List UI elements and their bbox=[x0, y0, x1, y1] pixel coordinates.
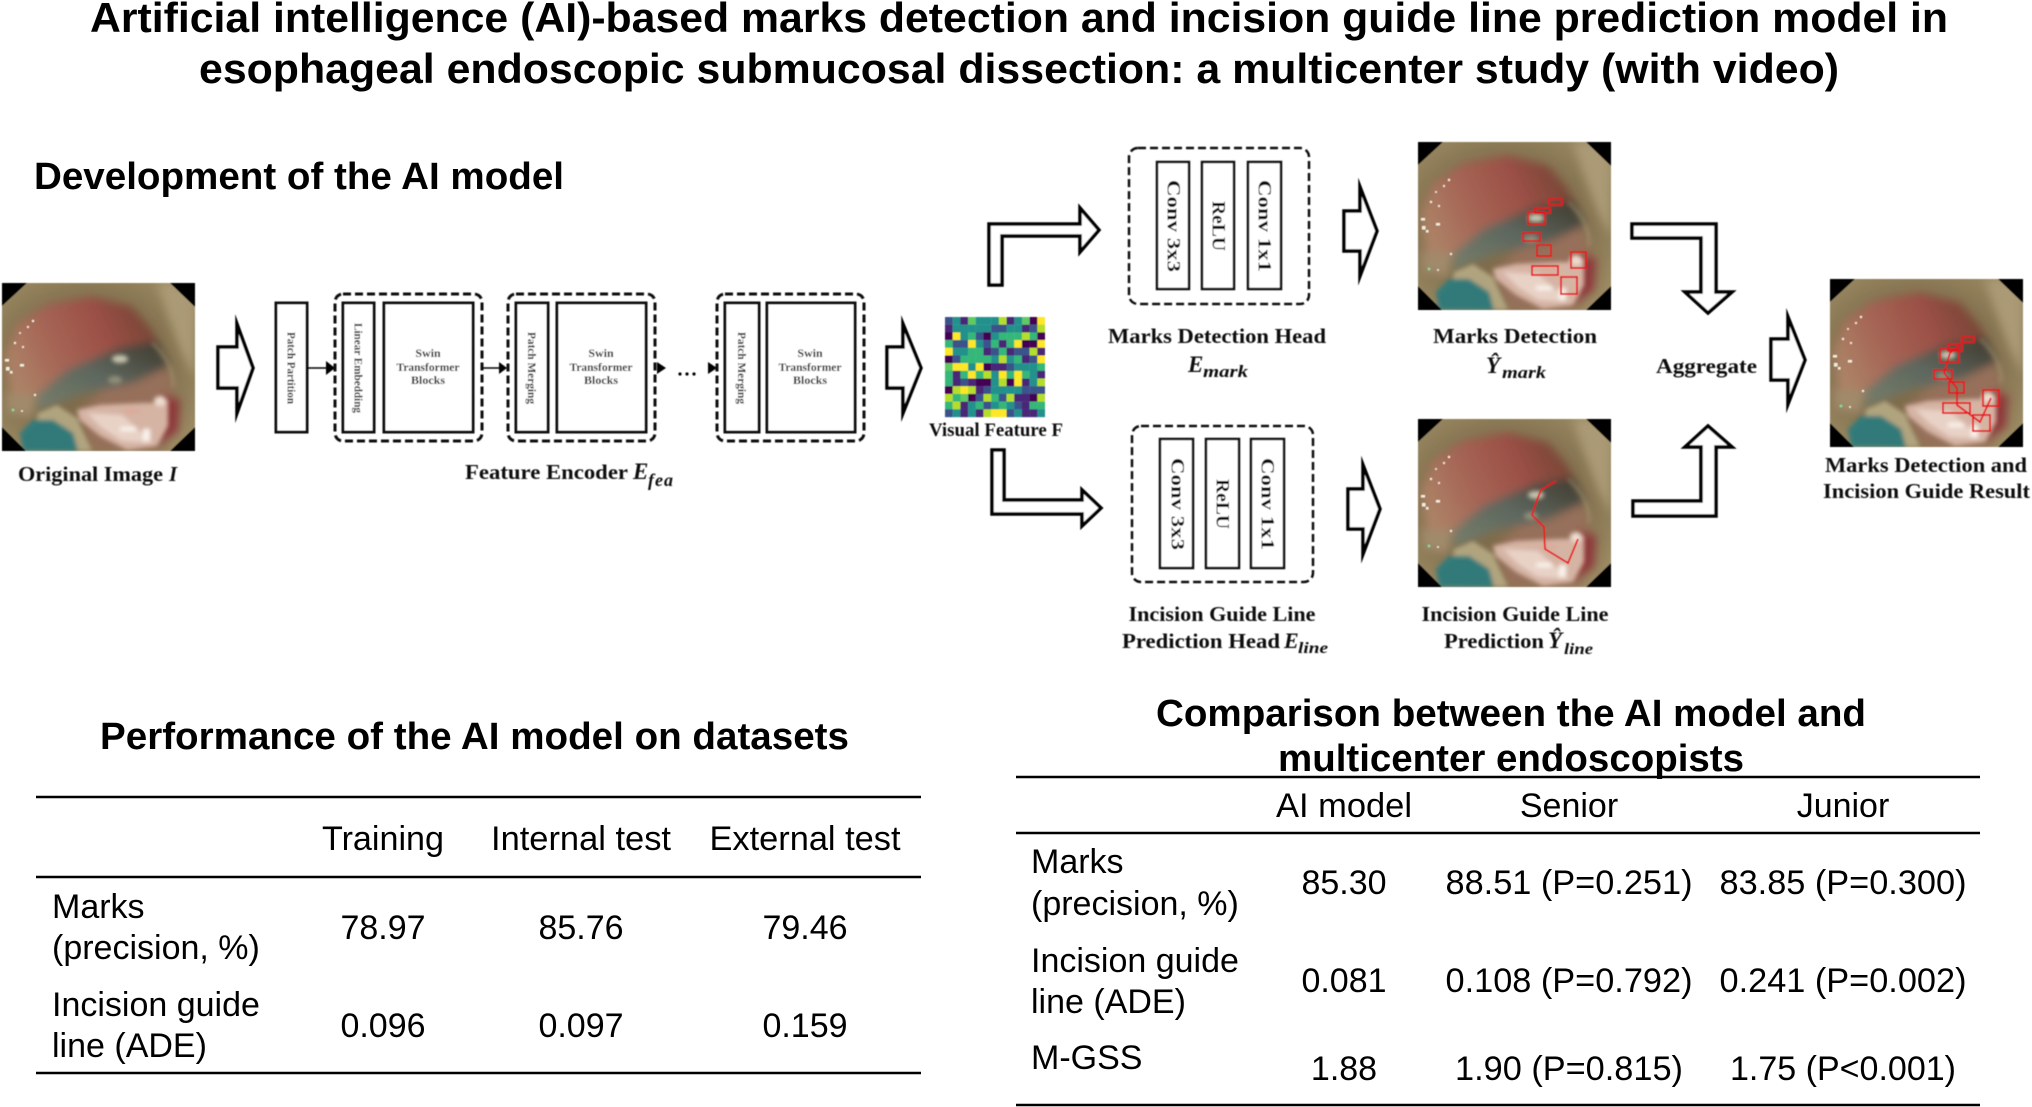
row: incision guide line ADE: 0.097 bbox=[538, 1007, 624, 1045]
heading: comparison: Comparison between the AI model and bbox=[1156, 693, 1866, 735]
encoder stage 1: Transformer bbox=[396, 360, 460, 374]
image: incision guide line output: Ŷ bbox=[1548, 627, 1564, 653]
image: incision guide line output: line bbox=[1564, 641, 1593, 658]
column headers: Senior bbox=[1520, 787, 1618, 825]
marks detection head: Conv 3x3 bbox=[1162, 180, 1184, 272]
heading: comparison: multicenter endoscopists bbox=[1278, 738, 1744, 780]
panel: comparison table bbox=[1016, 693, 1980, 1105]
row: M-GSS: 1.88 bbox=[1311, 1050, 1377, 1088]
encoder stage 1 bbox=[335, 294, 482, 441]
row: marks precision: Marks bbox=[1031, 843, 1124, 881]
marks detection head: Conv 1x1 bbox=[1254, 180, 1274, 272]
incision guide line prediction head: Conv 3x3 bbox=[1166, 458, 1188, 550]
image: marks detection output bbox=[1418, 142, 1611, 382]
encoder stage 2: Swin bbox=[588, 346, 614, 360]
row: incision guide line ADE: 0.081 bbox=[1301, 962, 1387, 1000]
arrow: original image to patch partition bbox=[218, 324, 253, 413]
row: marks precision: (precision, %) bbox=[52, 929, 260, 967]
row: M-GSS: 1.90 (P=0.815) bbox=[1455, 1050, 1683, 1088]
image: marks detection output: Marks Detection bbox=[1433, 324, 1597, 348]
incision guide line prediction head: ReLU bbox=[1212, 479, 1232, 529]
encoder stage 3: Blocks bbox=[793, 373, 827, 387]
label: feature encoder: E bbox=[632, 459, 648, 484]
image: marks detection output: Ŷ bbox=[1486, 352, 1502, 378]
row: incision guide line ADE: line (ADE) bbox=[1031, 983, 1186, 1021]
arrow: encoder to visual feature bbox=[887, 324, 921, 413]
panel: performance table bbox=[36, 716, 921, 1073]
row: M-GSS: M-GSS bbox=[1031, 1039, 1142, 1077]
image: combined result: Marks Detection and bbox=[1825, 453, 2027, 477]
encoder stage 1: Swin bbox=[415, 346, 441, 360]
marks detection head: mark bbox=[1203, 362, 1249, 381]
marks detection head: ReLU bbox=[1208, 201, 1228, 251]
row: incision guide line ADE: 0.096 bbox=[340, 1007, 426, 1045]
patch partition box bbox=[276, 303, 307, 432]
label: aggregate: Aggregate bbox=[1656, 354, 1757, 378]
encoder stage 3: Swin bbox=[797, 346, 823, 360]
chart: visual feature heatmap: Visual Feature F bbox=[929, 420, 1063, 441]
encoder stage 3: Patch Merging bbox=[735, 332, 749, 404]
row: marks precision: 85.30 bbox=[1301, 864, 1387, 902]
column headers: Internal test bbox=[491, 820, 672, 858]
incision guide line prediction head: E bbox=[1283, 628, 1299, 653]
label: feature encoder: fea bbox=[648, 470, 674, 490]
image: incision guide line output bbox=[1418, 419, 1611, 658]
patch partition box: Patch Partition bbox=[284, 332, 298, 404]
row: incision guide line ADE bbox=[52, 986, 848, 1065]
marks detection head: Marks Detection Head bbox=[1108, 324, 1326, 348]
image: incision guide line output: Prediction bbox=[1444, 629, 1544, 653]
encoder stage 1: Blocks bbox=[411, 373, 445, 387]
row: incision guide line ADE: line (ADE) bbox=[52, 1027, 207, 1065]
image: incision guide line output: Incision Guide Line bbox=[1422, 602, 1608, 626]
image: marks detection output: mark bbox=[1502, 363, 1547, 382]
encoder stage 2: Patch Merging bbox=[525, 332, 539, 404]
encoder stage 2 bbox=[508, 294, 655, 441]
row: incision guide line ADE: 0.241 (P=0.002) bbox=[1720, 962, 1966, 1000]
image: original endoscopic image bbox=[2, 283, 195, 486]
image: combined result bbox=[1823, 279, 2030, 503]
marks detection head: E bbox=[1187, 352, 1203, 377]
arrow: visual feature to marks detection head bbox=[989, 208, 1099, 285]
incision guide line prediction head: Incision Guide Line bbox=[1128, 602, 1316, 626]
row: incision guide line ADE: Incision guide bbox=[1031, 942, 1239, 980]
row: marks precision: Marks bbox=[52, 888, 145, 926]
panel: AI model pipeline diagram bbox=[2, 142, 2030, 658]
row: marks precision: 85.76 bbox=[538, 909, 624, 947]
image: original endoscopic image: I bbox=[168, 462, 178, 486]
column headers: Training bbox=[322, 820, 444, 858]
chart: visual feature heatmap bbox=[929, 317, 1063, 441]
column headers bbox=[1276, 787, 1889, 825]
incision guide line prediction head: Conv 1x1 bbox=[1256, 458, 1278, 550]
row: marks precision: (precision, %) bbox=[1031, 885, 1239, 923]
row: M-GSS bbox=[1031, 1039, 1956, 1088]
row: M-GSS: 1.75 (P<0.001) bbox=[1730, 1050, 1956, 1088]
heading: development of the AI model: Development of the AI model bbox=[34, 156, 564, 198]
image: combined result: Incision Guide Result bbox=[1823, 479, 2030, 503]
feature encoder block bbox=[276, 294, 864, 490]
column headers bbox=[322, 820, 901, 858]
title bbox=[90, 0, 1948, 92]
heading: comparison bbox=[1156, 693, 1866, 780]
title: esophageal endoscopic submucosal dissection: a multicenter study (with video) bbox=[199, 45, 1839, 92]
arrow: visual feature to incision guide line head bbox=[992, 450, 1101, 526]
row: marks precision bbox=[52, 888, 848, 967]
image: original endoscopic image: Original Image bbox=[18, 462, 163, 486]
arrow: incision head to incision image bbox=[1348, 465, 1380, 554]
column headers: AI model bbox=[1276, 787, 1412, 825]
encoder stage 3: Transformer bbox=[778, 360, 842, 374]
incision guide line prediction head: line bbox=[1298, 640, 1328, 657]
encoder stage 2: Blocks bbox=[584, 373, 618, 387]
marks detection head bbox=[1108, 148, 1326, 381]
incision guide line prediction head bbox=[1122, 426, 1328, 657]
heading: performance: Performance of the AI model on datasets bbox=[100, 716, 849, 758]
row: incision guide line ADE bbox=[1031, 942, 1966, 1021]
row: marks precision bbox=[1031, 843, 1966, 923]
label: feature encoder: Feature Encoder bbox=[465, 460, 628, 484]
row: marks precision: 88.51 (P=0.251) bbox=[1446, 864, 1692, 902]
row: incision guide line ADE: 0.159 bbox=[762, 1007, 848, 1045]
row: marks precision: 79.46 bbox=[762, 909, 848, 947]
arrow: marks detection to aggregate bbox=[1632, 224, 1732, 313]
row: incision guide line ADE: 0.108 (P=0.792) bbox=[1446, 962, 1692, 1000]
column headers: External test bbox=[710, 820, 901, 858]
encoder stage 3 bbox=[717, 294, 864, 441]
label: feature encoder bbox=[465, 459, 674, 490]
row: incision guide line ADE: Incision guide bbox=[52, 986, 260, 1024]
arrow: marks head to marks detection image bbox=[1344, 187, 1377, 276]
encoder stage 2: Transformer bbox=[570, 360, 633, 374]
row: marks precision: 83.85 (P=0.300) bbox=[1720, 864, 1966, 902]
encoder stage 1: Linear Embedding bbox=[352, 323, 366, 413]
arrow: incision guide to aggregate bbox=[1633, 426, 1732, 516]
row: marks precision: 78.97 bbox=[340, 909, 426, 947]
incision guide line prediction head: Prediction Head bbox=[1122, 629, 1280, 653]
arrow: aggregate to result bbox=[1771, 317, 1805, 404]
column headers: Junior bbox=[1797, 787, 1889, 825]
